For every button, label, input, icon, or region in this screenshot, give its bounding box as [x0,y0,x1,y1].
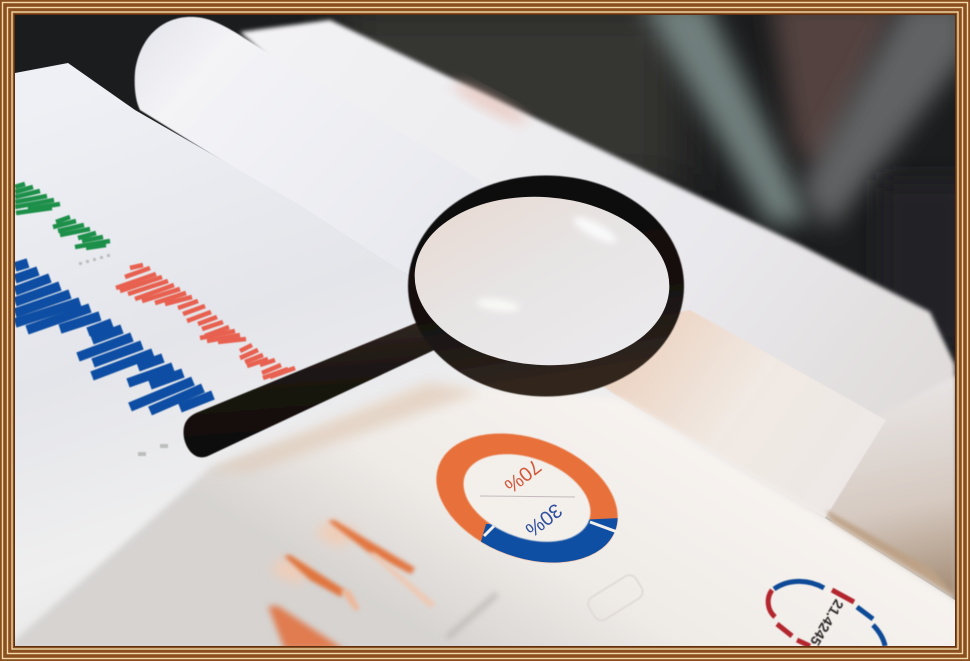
segment gaps [484,522,620,536]
gauge number: 21.4245 [807,597,847,649]
lens highlights [475,213,619,314]
orange bar chart, blurred [268,520,436,650]
curled paper roll [134,16,436,276]
donut centre [462,453,592,543]
lens glass [414,196,670,366]
blue segment [481,518,618,562]
small gauge chart [768,581,885,649]
label 30%: 30% [521,499,566,541]
gauge red arcs [768,590,775,617]
tan edge below flap [826,510,955,596]
blue bar chart [15,263,213,411]
cast shadow of handle [205,382,480,472]
grey axis ticks [79,254,168,456]
gauge blue top arc [774,581,824,589]
lens ring [408,176,684,396]
blurred pill button [588,574,644,621]
back paper sheet [240,20,955,600]
blurred dark background [318,15,955,354]
label 70%: 70% [500,455,545,497]
folded flap [604,310,885,518]
red bar chart [116,265,295,378]
right wedge of pages under the flap [826,375,955,600]
orange ring [436,432,618,564]
gauge blue right arcs [857,607,873,619]
blurred grey caption [447,594,497,638]
donut chart [436,432,618,564]
magnifying glass [184,176,684,457]
divider line [480,496,575,497]
green bar chart [15,184,110,248]
blurred red print on back sheet [449,76,531,130]
handle [184,318,445,457]
front page with donut and charts [0,382,970,660]
